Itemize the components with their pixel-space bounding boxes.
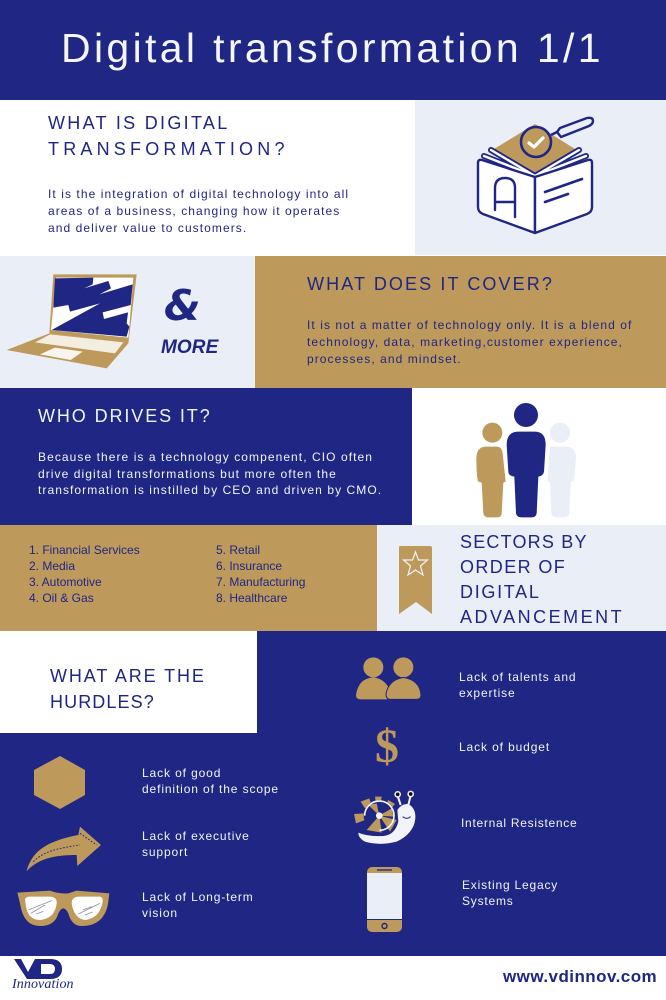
heading box — [0, 631, 257, 733]
list column 1 — [29, 543, 140, 605]
text: lack of executive support: support — [142, 845, 188, 859]
text: lack of talents — [459, 670, 576, 700]
heading: ORDER OF — [460, 557, 566, 577]
icon: hexagon — [34, 756, 85, 809]
icon: three people — [476, 403, 576, 518]
logo mark — [14, 959, 62, 979]
list column 1: 1. Financial Services — [29, 543, 140, 557]
heading — [460, 532, 624, 627]
panel: hurdles — [0, 631, 666, 956]
icon: ribbon with star — [399, 546, 432, 614]
text block: It is the integration of digital technology into all — [48, 187, 349, 201]
text: lack of scope — [142, 766, 279, 796]
text: legacy systems: Existing Legacy — [462, 878, 558, 892]
list column 2: 5. Retail — [216, 543, 260, 557]
text: legacy systems — [462, 878, 558, 908]
list column 1: 2. Media — [29, 559, 75, 573]
heading: TRANSFORMATION? — [48, 139, 289, 159]
heading: WHAT ARE THE — [50, 666, 206, 686]
text: lack of talents: Lack of talents and — [459, 670, 576, 684]
panel: book illustration — [415, 100, 666, 255]
text block: Because there is a technology compenent, CIO often — [38, 450, 373, 464]
heading: HURDLES? — [50, 692, 155, 712]
heading: WHAT IS DIGITAL — [48, 113, 230, 133]
panel: sectors list — [0, 525, 377, 631]
heading: WHAT DOES IT COVER? — [307, 274, 554, 294]
website url: www.vdinnov.com — [503, 967, 657, 986]
text: lack of executive support — [142, 829, 250, 859]
text: lack of budget: Lack of budget — [459, 740, 550, 754]
text block — [307, 318, 632, 366]
text block — [38, 450, 382, 497]
heading: WHO DRIVES IT? — [38, 406, 212, 426]
title: Digital transformation 1/1 — [61, 25, 604, 71]
logo wordmark: Innovation — [12, 977, 74, 992]
heading: DIGITAL — [460, 582, 541, 602]
list column 2: 8. Healthcare — [216, 591, 287, 605]
text: lack of long-term vision: Lack of Long-term — [142, 890, 254, 904]
list column 1: 3. Automotive — [29, 575, 102, 589]
icon: smartphone — [367, 867, 402, 932]
ampersand: & — [164, 281, 201, 330]
icon: open book with magnifier — [476, 116, 594, 234]
text: lack of scope: definition of the scope — [142, 782, 279, 796]
text: legacy systems: Systems — [462, 894, 514, 908]
header banner — [0, 0, 666, 100]
icon: laptop — [6, 274, 137, 368]
text block: transformation is instilled by CEO and driven by CMO. — [38, 483, 382, 497]
panel: who drives it — [0, 388, 412, 525]
heading — [50, 666, 206, 712]
text block: and deliver value to customers. — [48, 221, 247, 235]
panel: what does it cover — [255, 256, 666, 388]
text block: processes, and mindset. — [307, 352, 462, 366]
heading: SECTORS BY — [460, 532, 588, 552]
text block: areas of a business, changing how it operates — [48, 204, 340, 218]
text block: technology, data, marketing,customer experience, — [307, 335, 623, 349]
text: lack of scope: Lack of good — [142, 766, 221, 780]
text block: It is not a matter of technology only. It is a blend of — [307, 318, 632, 332]
text: lack of executive support: Lack of executive — [142, 829, 250, 843]
list column 2: 7. Manufacturing — [216, 575, 305, 589]
icon: two people — [356, 657, 420, 700]
text: lack of talents: expertise — [459, 686, 516, 700]
text: lack of long-term vision — [142, 890, 254, 920]
panel: laptop and more — [0, 256, 255, 388]
heading — [48, 113, 289, 159]
icon: arrow — [26, 826, 101, 871]
text: lack of long-term vision: vision — [142, 906, 178, 920]
text block: drive digital transformations but more often the — [38, 466, 337, 480]
icon: glasses — [17, 890, 110, 926]
icon: snail — [354, 790, 416, 844]
text: internal resistence: Internal Resistence — [461, 816, 577, 830]
heading: ADVANCEMENT — [460, 607, 624, 627]
icon: dollar: $ — [375, 720, 399, 773]
list column 1: 4. Oil & Gas — [29, 591, 94, 605]
text block — [48, 187, 349, 235]
panel: sectors heading — [377, 525, 666, 631]
more label: MORE — [161, 337, 218, 358]
list column 2: 6. Insurance — [216, 559, 282, 573]
logo — [12, 959, 74, 992]
panel: what is digital transformation — [0, 100, 415, 255]
list column 2 — [216, 543, 305, 605]
